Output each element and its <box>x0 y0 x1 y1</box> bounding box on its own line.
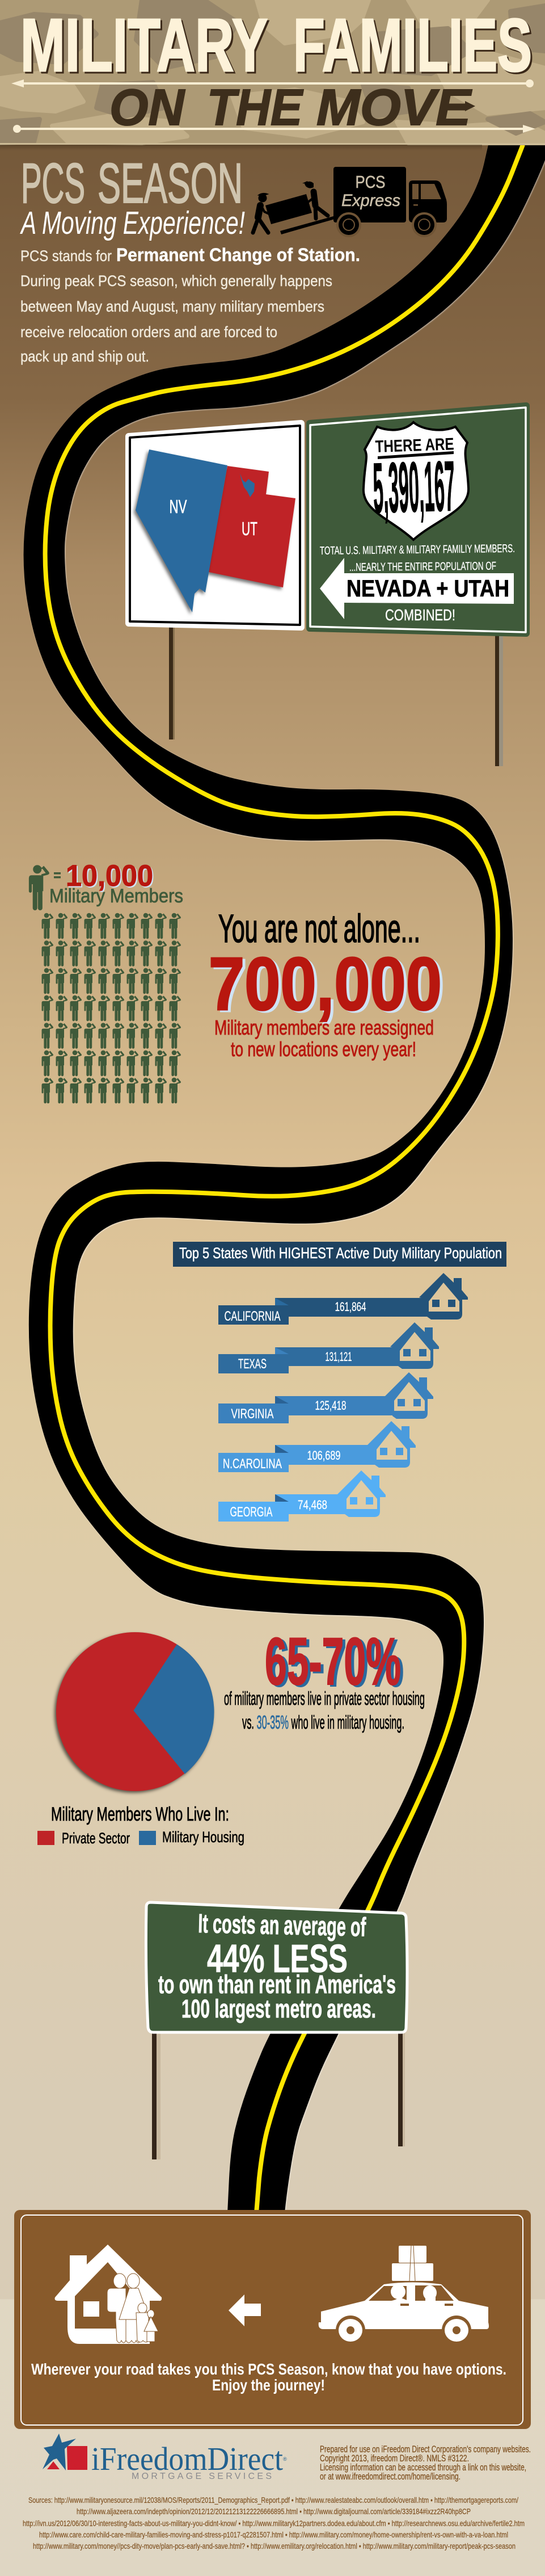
subtitle: On The Move <box>109 79 475 136</box>
map: Utah <box>209 466 295 587</box>
icon: highway shield <box>364 422 468 540</box>
bar: California: 161,864 <box>335 1300 366 1314</box>
bar: Virginia: VIRGINIA <box>231 1406 273 1422</box>
text block: PCS definition: pack up and ship out. <box>20 348 149 365</box>
text block: PCS definition: receive relocation orders and are forced to <box>20 323 277 341</box>
cost sign: 44% less: to own than rent in America's <box>158 1970 396 1999</box>
cost sign: 44% less: 44% LESS <box>207 1936 348 1981</box>
arrow rule below subtitle <box>13 125 535 133</box>
heading: PCS Season: SEASON <box>98 152 243 215</box>
title: Military Families <box>20 3 532 87</box>
subtitle: On The Move: ON <box>109 79 185 136</box>
icon: moving truck with movers <box>253 167 447 237</box>
text block: PCS definition: Permanent Change of Station. <box>116 245 360 265</box>
bar: North Carolina: 106,689 <box>307 1448 340 1463</box>
bar: Virginia: 125,418 <box>315 1398 346 1413</box>
legal copy: or at www.ifreedomdirect.com/home/licensing. <box>320 2471 460 2482</box>
bar: Georgia: GEORGIA <box>230 1505 272 1520</box>
sign posts: map sign and population sign <box>169 624 503 766</box>
population sign: COMBINED! <box>385 606 455 624</box>
map: Nevada <box>136 449 227 612</box>
winding road <box>24 145 545 2213</box>
text block: PCS definition: PCS stands for <box>20 247 112 264</box>
bar: California <box>218 1273 468 1325</box>
subtitle: On The Move: THE <box>207 79 304 136</box>
population sign <box>310 406 526 633</box>
big number: 65-70%: 65-70% <box>265 1624 401 1699</box>
icon: moving truck with movers: Express <box>341 191 400 210</box>
sources list <box>23 2495 525 2550</box>
header band with camouflage <box>0 0 545 145</box>
logo: iFreedomDirect: ® <box>283 2456 287 2462</box>
map: Nevada: NV <box>169 496 187 517</box>
text block: PCS definition: During peak PCS season, which generally happens <box>20 272 332 289</box>
logo: iFreedomDirect: MORTGAGE SERVICES <box>132 2472 272 2481</box>
logo: iFreedomDirect <box>43 2434 287 2481</box>
map: Utah: UT <box>242 518 257 539</box>
pictogram: grid of soldiers <box>42 913 181 1103</box>
legal copy <box>320 2444 531 2482</box>
big number: 700,000: 700,000 <box>209 942 442 1026</box>
heading: PCS Season: PCS <box>21 152 85 215</box>
caption: reassigned every year: to new locations every year! <box>231 1037 416 1061</box>
text block: PCS definition <box>20 245 360 365</box>
panel: closing sign <box>14 2210 531 2429</box>
arrow: car toward house <box>229 2295 261 2326</box>
subtitle: On The Move: MOVE <box>316 79 472 136</box>
icon: family and house <box>55 2245 162 2344</box>
bar: Georgia <box>218 1470 386 1522</box>
bar: North Carolina <box>218 1421 416 1472</box>
caption: reassigned every year: Military members are reassigned <box>214 1016 434 1039</box>
title: Military Families: MILITARY <box>20 3 268 87</box>
bar: North Carolina: N.CAROLINA <box>223 1456 282 1472</box>
key: one soldier equals 10,000: Military Members <box>49 885 183 907</box>
cost sign: 44% less: 100 largest metro areas. <box>181 1994 376 2023</box>
heading: PCS Season <box>21 152 243 215</box>
caption: private sector housing <box>224 1688 425 1733</box>
icon: moving truck with movers: PCS <box>355 172 386 192</box>
pie chart: housing split <box>56 1632 214 1791</box>
caption: private sector housing: vs. 30-35% who live in military housing. <box>242 1712 404 1733</box>
logo: iFreedomDirect: iFreedomDirect <box>91 2440 283 2477</box>
population sign: NEVADA + UTAH <box>347 575 509 602</box>
legend: who lives where <box>37 1804 244 1847</box>
legal copy: Copyright 2013, ifreedom Direct®. NMLS #3122. <box>320 2453 469 2464</box>
bar: Texas: TEXAS <box>238 1356 267 1372</box>
chart title: top 5 states <box>173 1242 506 1267</box>
key: one soldier equals 10,000 <box>29 859 183 910</box>
map sign: Nevada and Utah <box>129 423 301 627</box>
legend: who lives where: Military Members Who Live In: <box>51 1804 229 1825</box>
caption: reassigned every year <box>214 1016 434 1061</box>
subheading: A Moving Experience: A Moving Experience! <box>20 205 245 241</box>
cost sign: 44% less <box>146 1902 407 2032</box>
cost sign: 44% less: It costs an average of <box>198 1908 366 1942</box>
sign posts: cost sign <box>152 2032 405 2159</box>
bar: California: CALIFORNIA <box>225 1309 280 1324</box>
closing message: Enjoy the journey! <box>212 2376 325 2394</box>
arrow: pointing left to the map <box>320 558 514 619</box>
bar: Virginia <box>218 1372 433 1423</box>
bar: Texas: 131,121 <box>326 1350 352 1364</box>
closing message <box>31 2360 506 2394</box>
key: one soldier equals 10,000: 10,000 <box>66 859 153 893</box>
bar: Georgia: 74,468 <box>298 1498 327 1512</box>
shadow below header <box>0 145 482 150</box>
icon: highway shield: THERE ARE <box>375 435 454 456</box>
legend: who lives where: Private Sector <box>62 1830 130 1847</box>
text block: PCS definition: between May and August, many military members <box>20 298 324 315</box>
legend: who lives where: Military Housing <box>162 1829 244 1846</box>
icon: car with luggage <box>319 2246 489 2345</box>
arrow rule above subtitle <box>11 79 534 87</box>
bar: Texas <box>218 1322 439 1373</box>
